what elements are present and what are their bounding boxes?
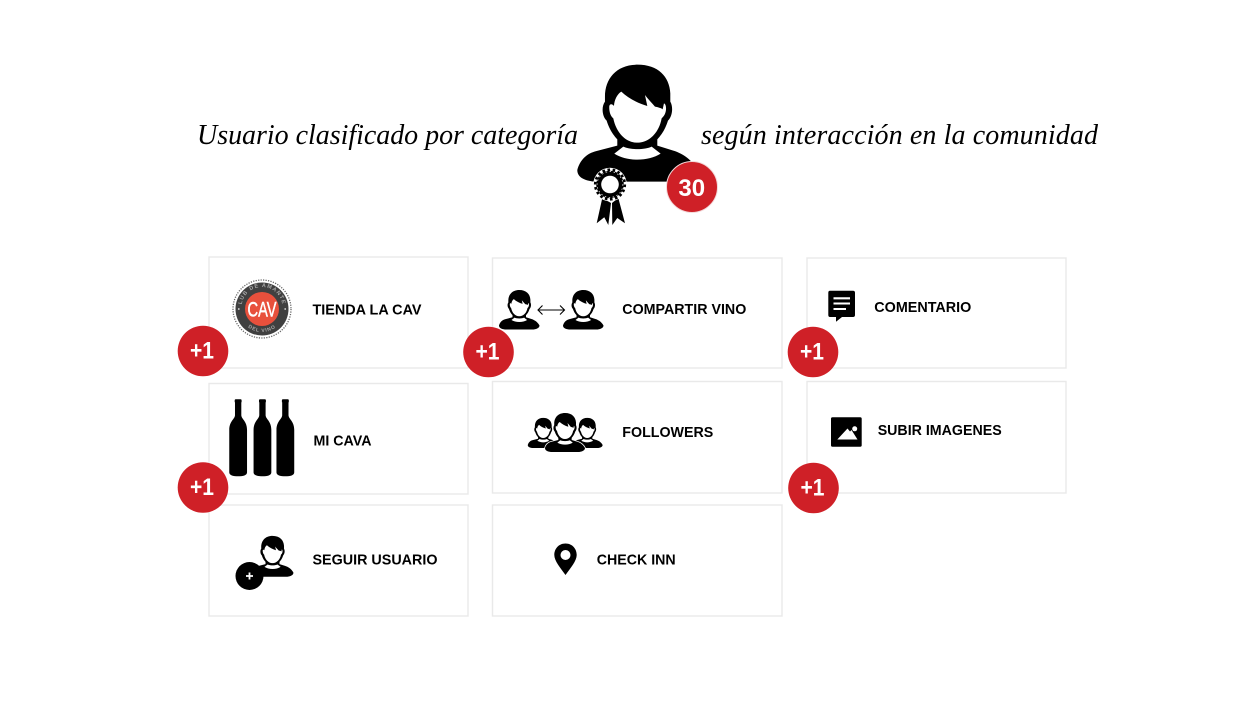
label: COMENTARIO [874,299,972,316]
panel: check inn [492,505,782,616]
panel: followers [492,382,782,493]
badge: tienda +1 [178,326,228,376]
label: CHECK INN [597,552,676,568]
icon: cav logo: DEL VINO [248,324,275,332]
panel: subir imagenes [807,382,1066,493]
panel: tienda la cav [208,256,469,369]
user silhouette [577,65,697,182]
badge: compartir +1: +1 [476,338,500,366]
label: COMPARTIR VINO [622,301,747,318]
icon: location pin [554,544,577,575]
badge: comentario +1: +1 [800,338,824,366]
badge: mi cava +1: +1 [190,474,214,501]
badge: tienda +1: +1 [190,338,214,364]
label: MI CAVA [314,432,372,450]
badge: comentario +1 [788,327,838,377]
icon: comment bubble [828,291,855,322]
label: SUBIR IMAGENES [878,422,1002,439]
panel: mi cava [209,384,468,494]
label: FOLLOWERS [622,424,713,441]
score badge: 30 [678,175,705,202]
rosette ribbon [593,168,627,225]
score badge [666,162,718,212]
panel: compartir vino [492,258,782,368]
icon: group of users [528,413,603,452]
title: right text: según interacción en la comunidad [701,120,1099,151]
badge: mi cava +1 [178,462,228,513]
icon: image [831,417,862,447]
badge: compartir +1 [463,327,514,377]
icon: user with rosette and score badge [577,65,718,225]
icon: cav logo: CLUB DE AMANTES [238,283,286,304]
icon: cav logo [232,279,292,339]
icon: three bottles [229,399,294,476]
label: TIENDA LA CAV [312,302,422,318]
badge: subir imagenes +1: +1 [800,474,824,502]
badge: subir imagenes +1 [788,463,839,513]
icon: add user [236,536,293,590]
title: left text: Usuario clasificado por categoría [197,120,578,151]
icon: cav logo: CAV [248,299,276,322]
label: SEGUIR USUARIO [312,552,438,568]
icon: two users exchanging [499,290,604,329]
panel: seguir usuario [209,505,468,616]
panel: comentario [807,258,1066,368]
